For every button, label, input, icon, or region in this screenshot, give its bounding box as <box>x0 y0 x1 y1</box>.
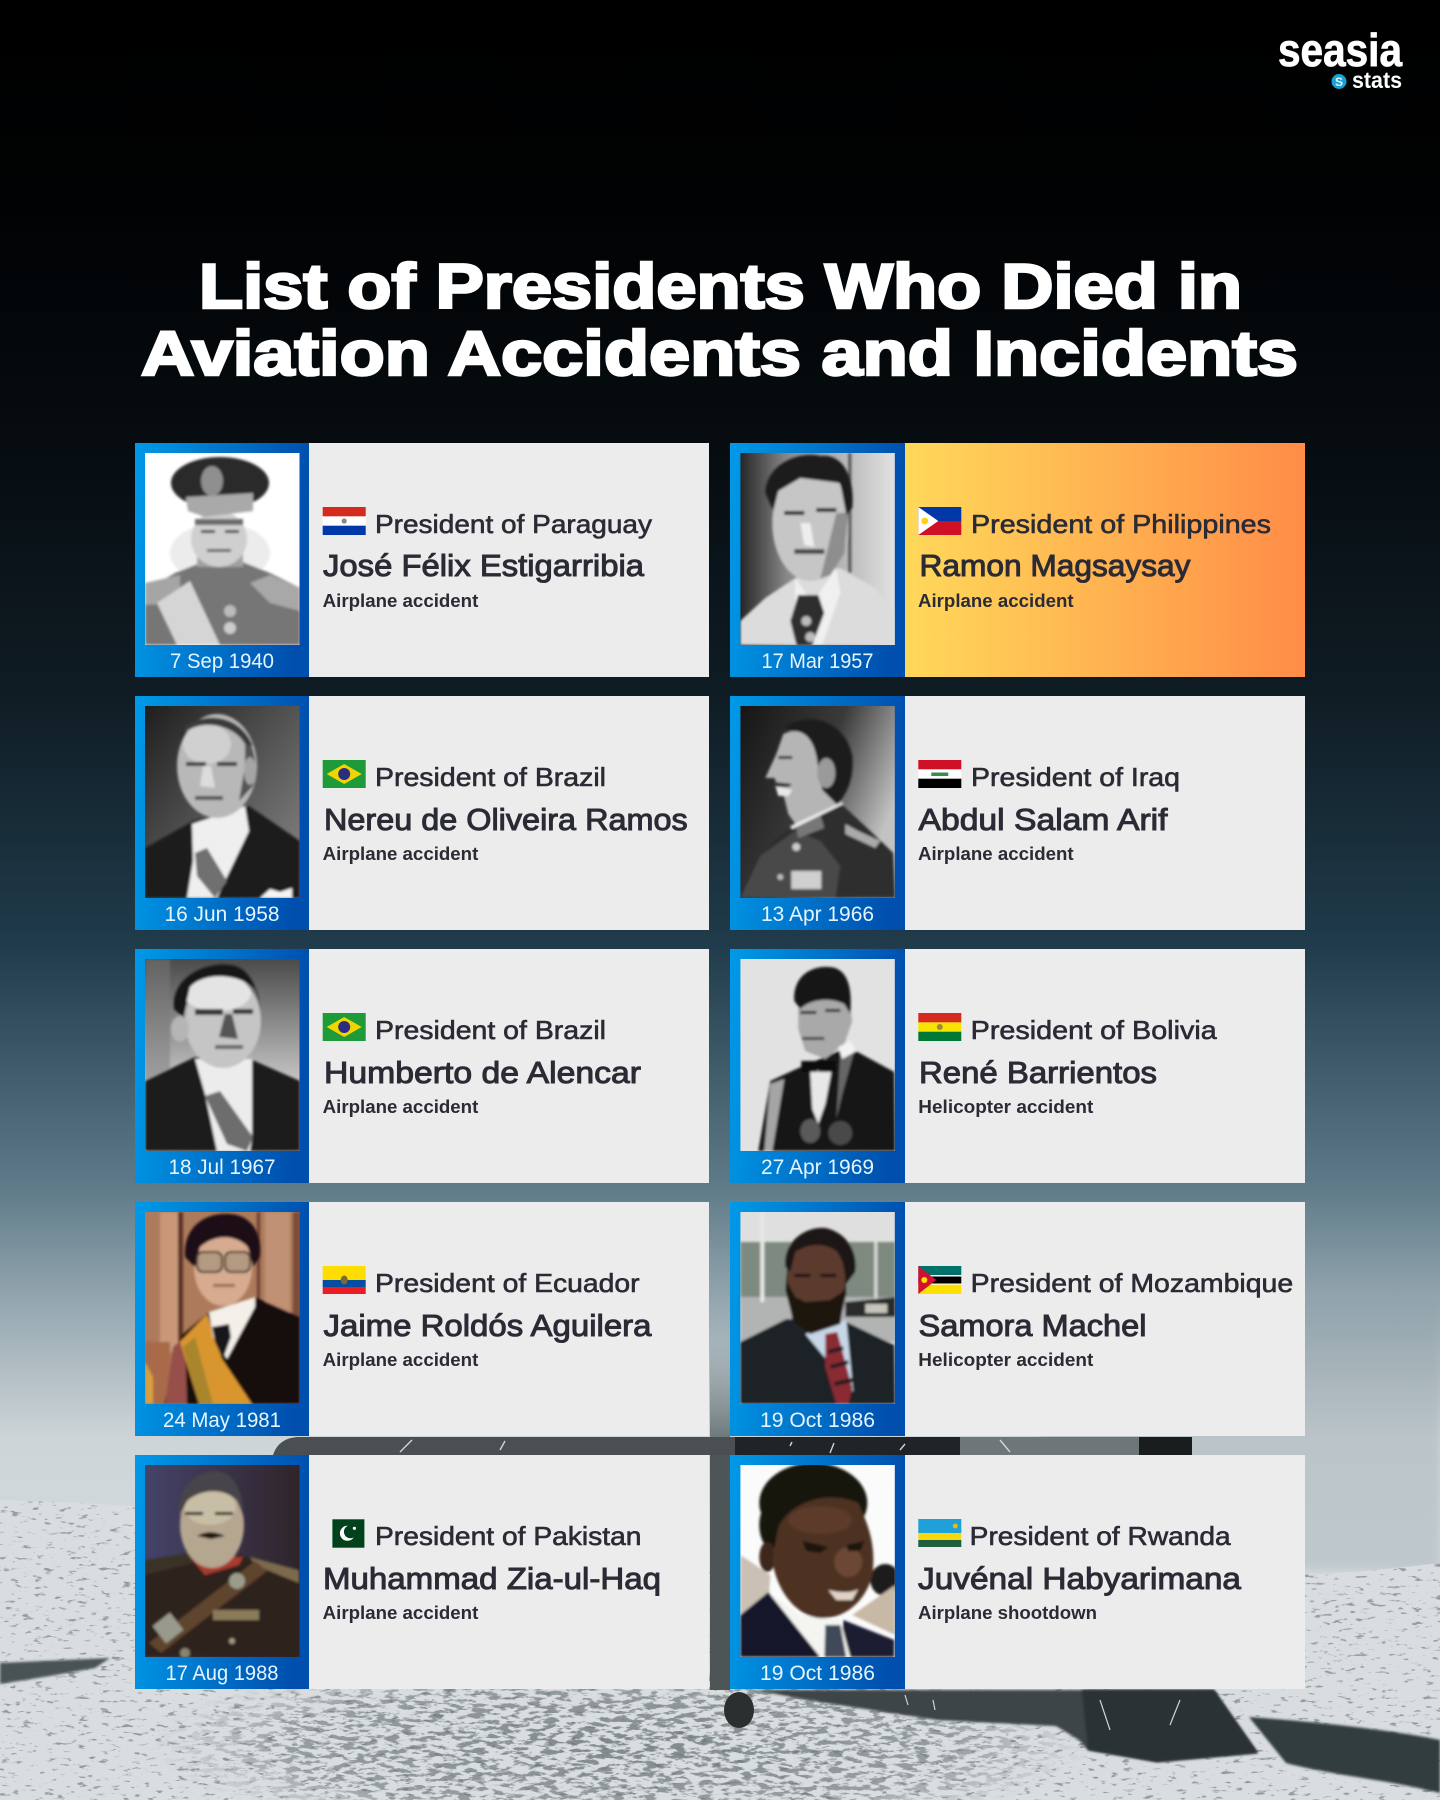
name: Samora Machel <box>918 1308 1146 1343</box>
date: 17 Aug 1988 <box>166 1662 278 1685</box>
flag: Paraguay <box>323 507 366 535</box>
flag: Brazil <box>323 760 366 788</box>
portrait: Zia <box>145 1465 300 1658</box>
portrait: Habyarimana <box>740 1463 900 1657</box>
flag: Bolivia <box>918 1013 961 1041</box>
date: 17 Mar 1957 <box>762 650 874 673</box>
panel: Pakistan, Muhammad Zia-ul-Haq <box>135 1455 709 1689</box>
role: President of Philippines <box>971 509 1271 539</box>
name: Muhammad Zia-ul-Haq <box>323 1561 661 1596</box>
flag: Mozambique <box>918 1266 961 1294</box>
title: Aviation Accidents and Incidents <box>141 319 1298 389</box>
cause: Airplane accident <box>918 590 1074 611</box>
logo: seasia stats: stats <box>1352 67 1402 93</box>
cause: Airplane accident <box>323 1096 478 1117</box>
flag: Iraq <box>918 760 961 788</box>
panel: Philippines, Ramon Magsaysay (highlighted) <box>730 443 1305 677</box>
role: President of Brazil <box>375 762 606 792</box>
panel: Brazil, Humberto de Alencar <box>135 949 709 1183</box>
portrait: Barrientos <box>740 959 895 1151</box>
cause: Airplane accident <box>323 1349 478 1370</box>
date: 16 Jun 1958 <box>164 903 280 926</box>
panel: Rwanda, Juvénal Habyarimana <box>730 1455 1305 1689</box>
role: President of Rwanda <box>970 1521 1231 1551</box>
name: José Félix Estigarribia <box>323 548 645 583</box>
name: Humberto de Alencar <box>324 1055 641 1090</box>
portrait: Magsaysay <box>740 453 895 645</box>
role: President of Paraguay <box>375 509 652 539</box>
role: President of Iraq <box>971 762 1180 792</box>
date: 7 Sep 1940 <box>170 650 274 673</box>
cause: Helicopter accident <box>918 1349 1093 1370</box>
portrait: Machel <box>740 1212 895 1404</box>
portrait: Estigarribia <box>145 453 300 645</box>
panel: Iraq, Abdul Salam Arif <box>730 696 1305 930</box>
portrait: Roldós <box>145 1212 300 1404</box>
date: 19 Oct 1986 <box>760 1662 875 1685</box>
logo: seasia stats: seasia <box>1278 24 1402 76</box>
cause: Helicopter accident <box>918 1096 1093 1117</box>
panel: Bolivia, René Barrientos <box>730 949 1305 1183</box>
cause: Airplane accident <box>323 843 478 864</box>
cause: Airplane accident <box>918 843 1074 864</box>
date: 19 Oct 1986 <box>760 1409 875 1432</box>
title: List of Presidents Who Died in <box>199 252 1242 322</box>
date: 24 May 1981 <box>163 1409 281 1432</box>
title <box>141 252 1298 389</box>
role: President of Brazil <box>375 1015 606 1045</box>
flag: Ecuador <box>323 1266 366 1294</box>
cause: Airplane accident <box>323 1602 478 1623</box>
cause: Airplane accident <box>323 590 478 611</box>
cause: Airplane shootdown <box>918 1602 1097 1623</box>
logo: seasia stats <box>1278 24 1402 93</box>
logo: seasia stats: S <box>1335 75 1343 89</box>
date: 27 Apr 1969 <box>761 1156 874 1179</box>
panel: Brazil, Nereu de Oliveira Ramos <box>135 696 709 930</box>
panel: Mozambique, Samora Machel <box>730 1202 1305 1436</box>
background: crashed plane wreck <box>273 1340 1258 1762</box>
name: Ramon Magsaysay <box>920 548 1191 583</box>
flag: Philippines <box>918 507 961 535</box>
role: President of Pakistan <box>375 1521 642 1551</box>
name: Abdul Salam Arif <box>918 802 1168 837</box>
flag: Pakistan <box>332 1519 364 1548</box>
portrait: Arif <box>740 706 895 898</box>
name: Juvénal Habyarimana <box>918 1561 1242 1596</box>
date: 13 Apr 1966 <box>761 903 874 926</box>
name: Jaime Roldós Aguilera <box>324 1308 652 1343</box>
flag: Rwanda <box>918 1519 961 1547</box>
flag: Brazil <box>323 1013 366 1041</box>
background: snow ground with speckle <box>0 1500 1440 1800</box>
role: President of Mozambique <box>971 1268 1293 1298</box>
portrait: Nereu Ramos <box>145 706 300 898</box>
panel: Ecuador, Jaime Roldós Aguilera <box>135 1202 709 1436</box>
date: 18 Jul 1967 <box>168 1156 276 1179</box>
role: President of Bolivia <box>971 1015 1217 1045</box>
role: President of Ecuador <box>375 1268 640 1298</box>
name: Nereu de Oliveira Ramos <box>324 802 688 837</box>
name: René Barrientos <box>919 1055 1157 1090</box>
panel: Paraguay, José Félix Estigarribia <box>135 443 709 677</box>
portrait: Humberto <box>145 959 300 1151</box>
